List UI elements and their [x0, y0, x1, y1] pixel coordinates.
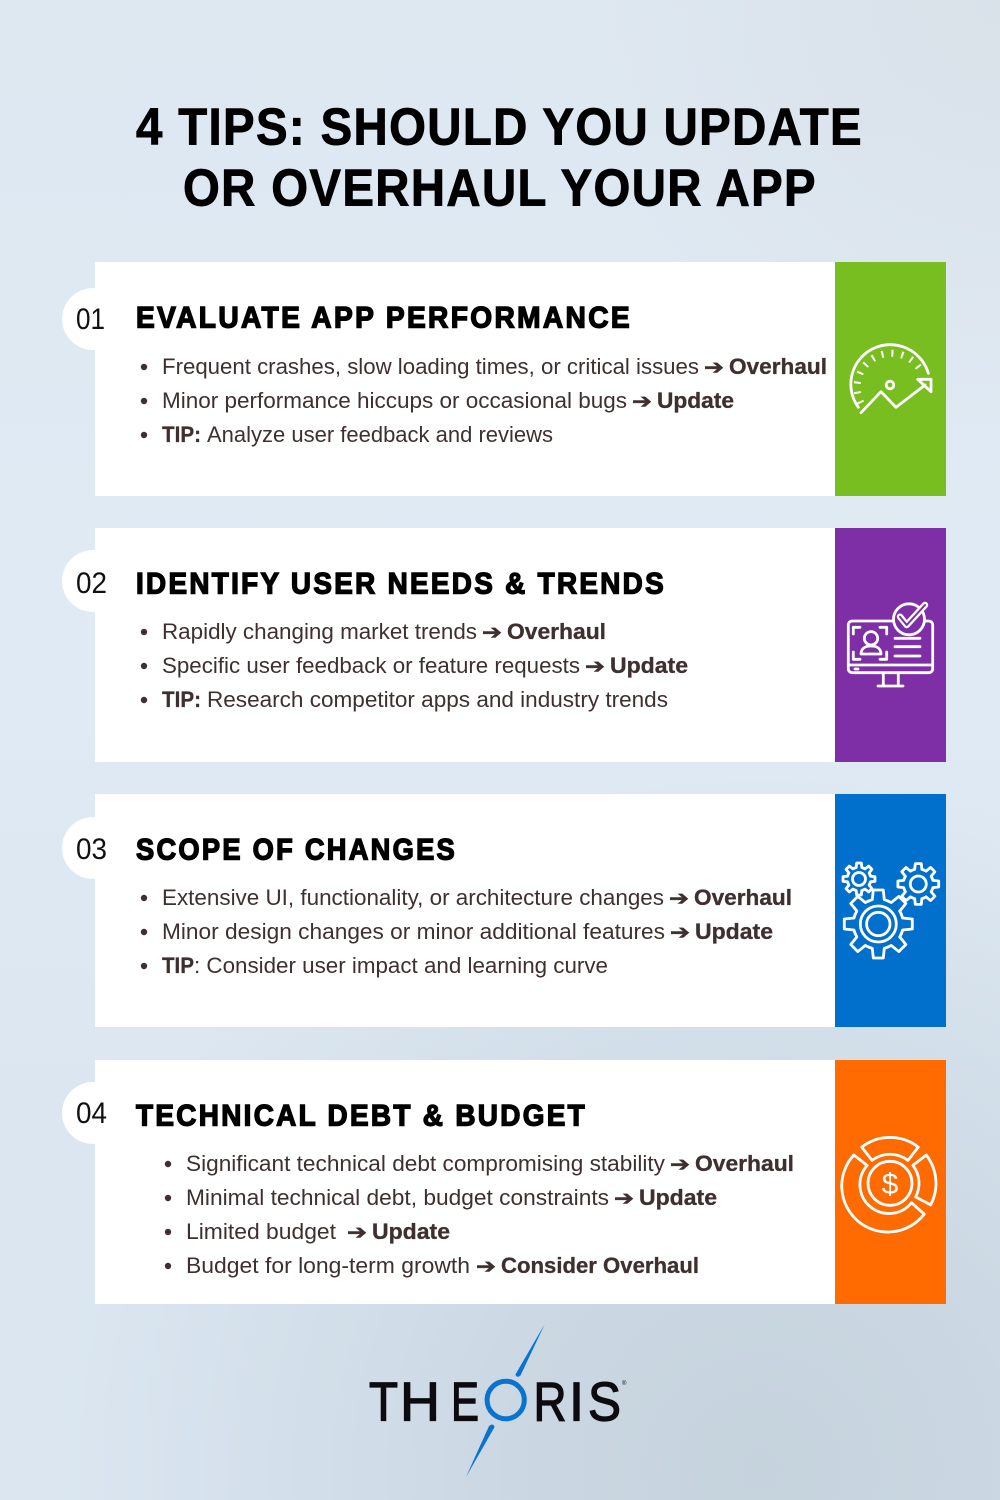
number badge 02: [62, 550, 124, 612]
bullet list: Research competitor apps and industry trends: [207, 687, 668, 712]
bullet list: [165, 1151, 794, 1278]
bullet list: Significant technical debt compromising stability: [186, 1151, 666, 1176]
number badge 03: 03: [76, 833, 107, 866]
panel: identify user needs and trends: [62, 528, 946, 762]
bullet list: ➔: [670, 920, 690, 944]
bullet list: Minimal technical debt, budget constraints: [186, 1185, 609, 1210]
colour column: purple: [835, 528, 946, 762]
bullet list: ➔: [482, 620, 502, 644]
bullet list: Update: [610, 653, 688, 678]
bullet list: Overhaul: [694, 885, 792, 910]
logo: Theoris: I: [569, 1370, 584, 1432]
logo: Theoris: S: [588, 1370, 621, 1432]
colour column: blue: [835, 794, 946, 1027]
icon: gears: [843, 863, 939, 958]
title: [136, 98, 863, 218]
heading: SCOPE OF CHANGES: [136, 834, 457, 866]
bullet list: Limited budget: [186, 1219, 337, 1244]
bullet list: : Consider user impact and learning curve: [194, 953, 608, 978]
number badge 03: [62, 817, 124, 879]
icon: speedometer with rising arrow: [851, 345, 931, 413]
number badge 02: 02: [76, 567, 107, 600]
bullet list: Update: [695, 919, 773, 944]
logo: Theoris: H: [400, 1370, 440, 1432]
icon: dollar coin with segmented ring: $: [882, 1168, 899, 1201]
bullet list: ➔: [347, 1220, 367, 1244]
bullet list: ➔: [670, 1152, 690, 1176]
bullet list: ➔: [476, 1254, 496, 1278]
panel: evaluate app performance: [62, 262, 946, 496]
bullet list: TIP:: [162, 687, 201, 712]
bullet list: Consider Overhaul: [501, 1253, 699, 1278]
heading: TECHNICAL DEBT & BUDGET: [136, 1100, 587, 1132]
bullet list: Overhaul: [729, 354, 827, 379]
bullet list: Update: [639, 1185, 717, 1210]
bullet list: Overhaul: [507, 619, 606, 644]
logo ring: [487, 1381, 524, 1419]
logo: Theoris: ®: [622, 1380, 627, 1387]
bullet list: TIP:: [162, 422, 201, 447]
bullet list: Analyze user feedback and reviews: [207, 422, 553, 447]
bullet list: Overhaul: [695, 1151, 794, 1176]
bullet list: Specific user feedback or feature requests: [162, 653, 580, 678]
logo: Theoris: R: [534, 1370, 566, 1432]
icon: monitor with user profile and check: [848, 604, 933, 686]
bullet list: [141, 619, 688, 712]
bullet list: ➔: [632, 389, 652, 413]
logo: Theoris: T: [369, 1370, 398, 1432]
bullet list: Minor design changes or minor additional features: [162, 919, 665, 944]
number badge 04: [62, 1082, 124, 1144]
heading: EVALUATE APP PERFORMANCE: [136, 302, 632, 334]
number badge 04: 04: [76, 1097, 107, 1130]
panel: scope of changes: [62, 794, 946, 1027]
bullet list: Budget for long-term growth: [186, 1253, 470, 1278]
bullet list: [141, 354, 827, 447]
icon: dollar coin with segmented ring: [842, 1137, 936, 1232]
logo slash: [466, 1324, 545, 1477]
bullet list: Minor performance hiccups or occasional bugs: [162, 388, 627, 413]
bullet list: ➔: [669, 886, 689, 910]
title: 4 TIPS: SHOULD YOU UPDATE: [136, 98, 863, 156]
heading: IDENTIFY USER NEEDS & TRENDS: [136, 568, 666, 600]
colour column: green: [835, 262, 946, 496]
logo: Theoris: E: [451, 1370, 479, 1432]
bullet list: Extensive UI, functionality, or architecture changes: [162, 885, 664, 910]
bullet list: ➔: [614, 1186, 634, 1210]
bullet list: [141, 885, 792, 978]
bullet list: Update: [372, 1219, 450, 1244]
bullet list: Rapidly changing market trends: [162, 619, 477, 644]
bullet list: Frequent crashes, slow loading times, or critical issues: [162, 354, 699, 379]
logo: Theoris: [369, 1324, 627, 1477]
number badge 01: [62, 288, 124, 350]
number badge 01: 01: [76, 303, 105, 336]
bullet list: ➔: [704, 355, 724, 379]
colour column: orange: [835, 1060, 946, 1304]
panel: technical debt and budget: [62, 1060, 946, 1304]
bullet list: ➔: [585, 654, 605, 678]
title: OR OVERHAUL YOUR APP: [183, 160, 817, 218]
bullet list: Update: [657, 388, 734, 413]
bullet list: TIP: [162, 953, 194, 978]
